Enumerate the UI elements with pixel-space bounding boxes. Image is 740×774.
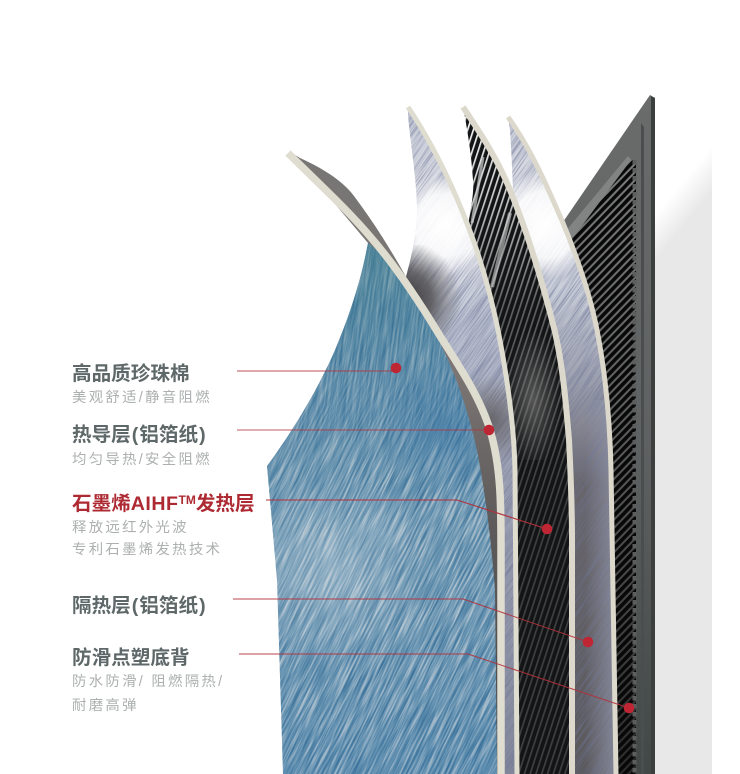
label: graphene heating layer: 石墨烯AIHFTM发热层: [72, 493, 255, 515]
description: anti-slip plastic back: [72, 674, 224, 714]
callout line: heat-conducting foil: [237, 425, 494, 435]
layer: pearl cotton back side: [292, 153, 501, 774]
description: pearl cotton: 美观舒适/静音阻燃: [72, 390, 212, 406]
layered heating panel illustration: [233, 95, 712, 774]
callout line: plastic back: [239, 654, 634, 713]
layer: blue pearl cotton: [267, 243, 497, 774]
description: graphene heating layer: 专利石墨烯发热技术: [72, 542, 222, 558]
label: anti-slip plastic back: 防滑点塑底背: [72, 647, 190, 669]
description: heat-conducting layer: 均匀导热/安全阻燃: [72, 452, 212, 468]
label: insulation layer: 隔热层(铝箔纸): [72, 595, 206, 617]
description: graphene heating layer: [72, 520, 222, 558]
layer: graphene AIHF heating film: [460, 106, 575, 774]
layer: plastic back panel: [555, 95, 655, 774]
callout line: insulation foil: [233, 599, 593, 647]
beige edge of pearl cotton: [288, 153, 501, 774]
callout line: graphene film: [266, 500, 552, 534]
description: anti-slip plastic back: 防水防滑/ 阻燃隔热/: [72, 674, 224, 690]
wall shadow: [655, 100, 712, 774]
description: anti-slip plastic back: 耐磨高弹: [72, 698, 139, 714]
label: heat-conducting layer: 热导层(铝箔纸): [72, 424, 206, 446]
label: pearl cotton: 高品质珍珠棉: [72, 363, 190, 385]
callout line: pearl cotton: [237, 363, 401, 373]
layer: insulation foil: [506, 116, 618, 774]
layer: heat-conducting foil: [406, 106, 520, 774]
description: graphene heating layer: 释放远红外光波: [72, 520, 189, 536]
